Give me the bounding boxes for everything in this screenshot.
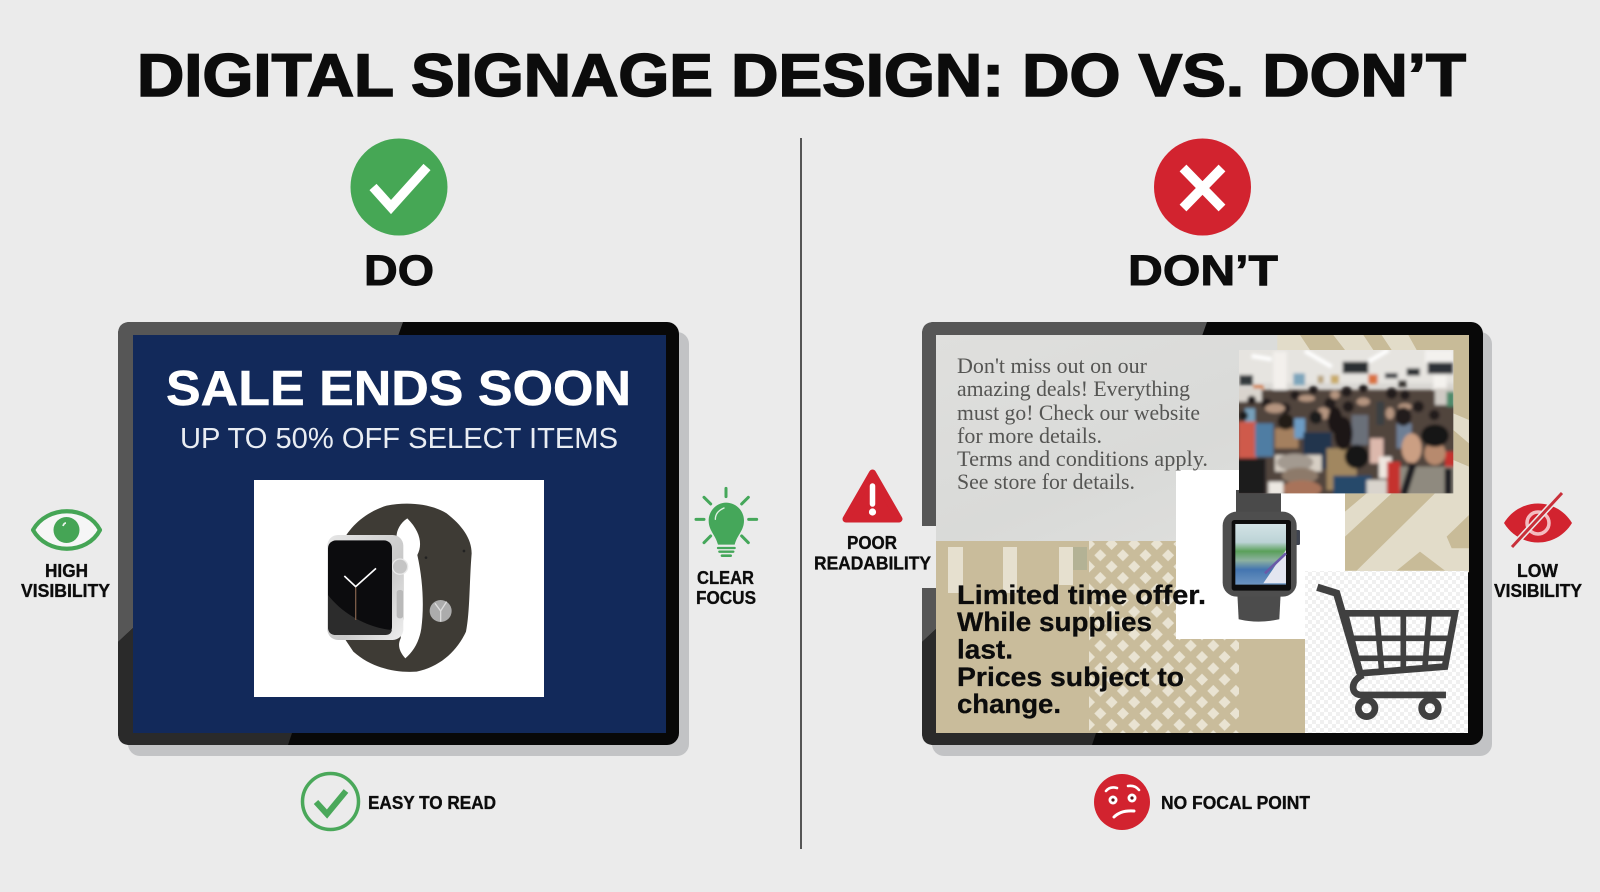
title: DIGITAL SIGNAGE DESIGN: DO VS. DON’T [137, 42, 1466, 109]
stripes [948, 547, 1087, 593]
product image box [254, 480, 544, 697]
callout: clear focus [696, 488, 757, 608]
tan geometric pattern [1277, 335, 1469, 572]
fine print paragraph [957, 353, 1208, 494]
bold disclaimer text: change. [957, 689, 1061, 719]
label [814, 532, 932, 574]
callout: high visibility [21, 511, 111, 601]
white watch block [1176, 470, 1345, 639]
fine print paragraph: Don't miss out on our [957, 353, 1147, 378]
icon: eye [33, 511, 100, 549]
label: VISIBILITY [21, 580, 111, 601]
callout: poor readability [814, 473, 932, 574]
good screen mockup [118, 322, 689, 756]
icon: worried face [1094, 774, 1150, 830]
label: EASY TO READ [368, 792, 496, 813]
label: FOCUS [696, 587, 756, 608]
fine print paragraph: See store for details. [957, 469, 1135, 494]
callout: no focal point [1094, 774, 1311, 830]
label [21, 560, 111, 601]
sale headline: SALE ENDS SOON [166, 362, 631, 416]
label: HIGH [45, 560, 88, 581]
label: LOW [1517, 560, 1559, 581]
label [1494, 560, 1583, 601]
icon: light bulb [696, 488, 757, 556]
diamond lattice [1089, 541, 1239, 733]
pixelated watch [1223, 490, 1300, 622]
shopping cart icon [1317, 587, 1455, 717]
screen shadow [128, 332, 689, 756]
fine print paragraph: amazing deals! Everything [957, 376, 1190, 401]
sale subheading: UP TO 50% OFF SELECT ITEMS [180, 423, 618, 455]
icon: green check badge [350, 138, 448, 236]
label: NO FOCAL POINT [1161, 792, 1311, 813]
label: VISIBILITY [1494, 580, 1583, 601]
fine print paragraph: must go! Check our website [957, 400, 1200, 425]
bold disclaimer text: While supplies [957, 607, 1152, 637]
product image: watch [327, 504, 472, 672]
label: POOR [847, 532, 897, 553]
screen bezel [118, 322, 679, 745]
bold disclaimer text: last. [957, 634, 1013, 664]
gray background block [936, 335, 1468, 542]
checker cart block [1305, 571, 1468, 733]
icon: warning triangle [846, 473, 899, 519]
navy display [133, 335, 666, 733]
heading: don't: DON’T [1128, 247, 1278, 295]
icon: outlined check [302, 774, 358, 830]
label: READABILITY [814, 552, 932, 574]
callout: easy to read [302, 774, 496, 830]
heading: do: DO [364, 247, 434, 295]
callout: low visibility [1494, 493, 1583, 601]
screen bezel [920, 322, 1483, 745]
label [696, 567, 756, 608]
fine print paragraph: Terms and conditions apply. [957, 446, 1208, 471]
panel: don't [814, 138, 1583, 830]
bold disclaimer text: Prices subject to [957, 662, 1184, 692]
fine print paragraph: for more details. [957, 423, 1102, 448]
label: CLEAR [697, 567, 754, 588]
panel: do [21, 138, 757, 830]
bold disclaimer text [957, 580, 1206, 719]
icon: crossed eye [1504, 493, 1572, 547]
center divider [800, 138, 802, 849]
bold disclaimer text: Limited time offer. [957, 580, 1206, 610]
screen shadow [932, 332, 1492, 756]
tan panel [936, 541, 1305, 733]
crowd photo [1235, 347, 1458, 498]
icon: red x badge [1154, 138, 1251, 236]
bad screen mockup [920, 322, 1492, 756]
cluttered display [936, 335, 1469, 733]
